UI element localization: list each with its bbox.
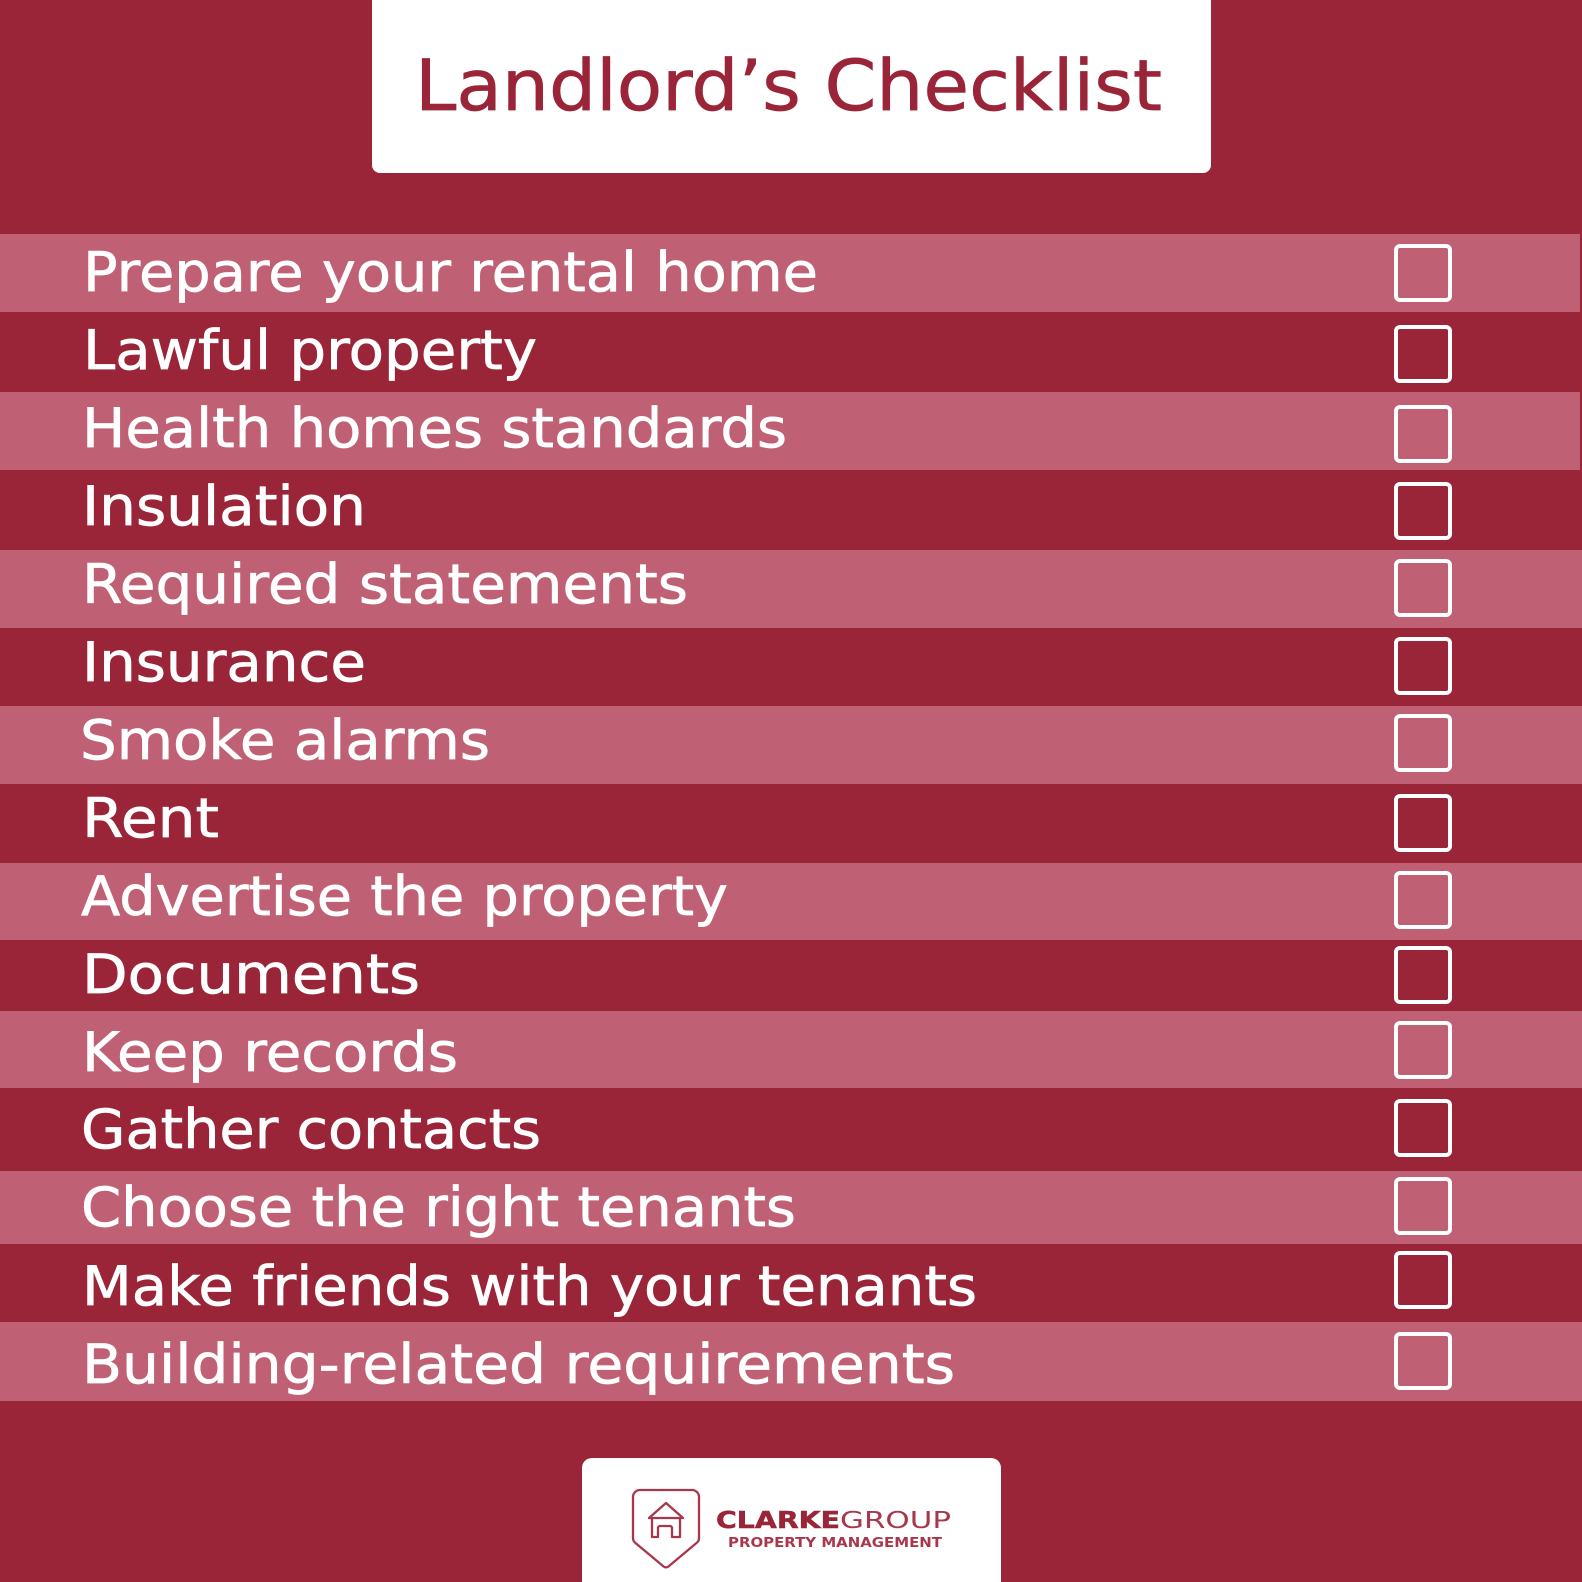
row: Insurance [82,631,1450,694]
row: Smoke alarms: Smoke alarms [80,709,490,772]
logo wordmark: CLARKE [716,1508,840,1534]
title: Landlord’s Checklist [415,45,1162,127]
row: Prepare your rental home [0,234,1580,312]
row: Gather contacts: Gather contacts [81,1098,541,1161]
row: Make friends with your tenants [82,1253,1450,1318]
row: Building-related requirements [0,1322,1582,1401]
row: Rent: Rent [82,787,219,850]
row: Keep records [0,1011,1582,1088]
logo wordmark [716,1508,951,1551]
row: Documents: Documents [82,943,420,1006]
row: Insulation [82,475,1450,538]
row: Building-related requirements: Building-related requirements [82,1333,955,1396]
row: Rent [82,787,1450,850]
row: Choose the right tenants: Choose the right tenants [81,1176,796,1239]
row: Health homes standards [0,392,1580,470]
row: Keep records: Keep records [82,1021,458,1084]
logo panel [582,1458,1001,1582]
row: Documents [82,943,1450,1006]
row: Gather contacts [81,1098,1450,1161]
row: Insulation: Insulation [82,475,366,538]
logo wordmark: GROUP [840,1508,951,1534]
checklist [0,234,1582,1401]
row: Health homes standards: Health homes standards [82,397,787,460]
icon: shield with house [633,1490,699,1567]
row: Make friends with your tenants: Make friends with your tenants [82,1255,977,1318]
row: Advertise the property [0,863,1582,940]
row: Prepare your rental home: Prepare your rental home [83,241,818,304]
row: Lawful property [83,319,1450,382]
title panel [372,0,1211,173]
row: Advertise the property: Advertise the property [81,865,728,928]
logo wordmark: PROPERTY MANAGEMENT [728,1535,943,1551]
row: Required statements [0,550,1582,628]
row: Lawful property: Lawful property [83,319,537,382]
row: Smoke alarms [0,706,1582,784]
row: Choose the right tenants [0,1171,1582,1244]
row: Required statements: Required statements [82,553,688,616]
row: Insurance: Insurance [82,631,366,694]
